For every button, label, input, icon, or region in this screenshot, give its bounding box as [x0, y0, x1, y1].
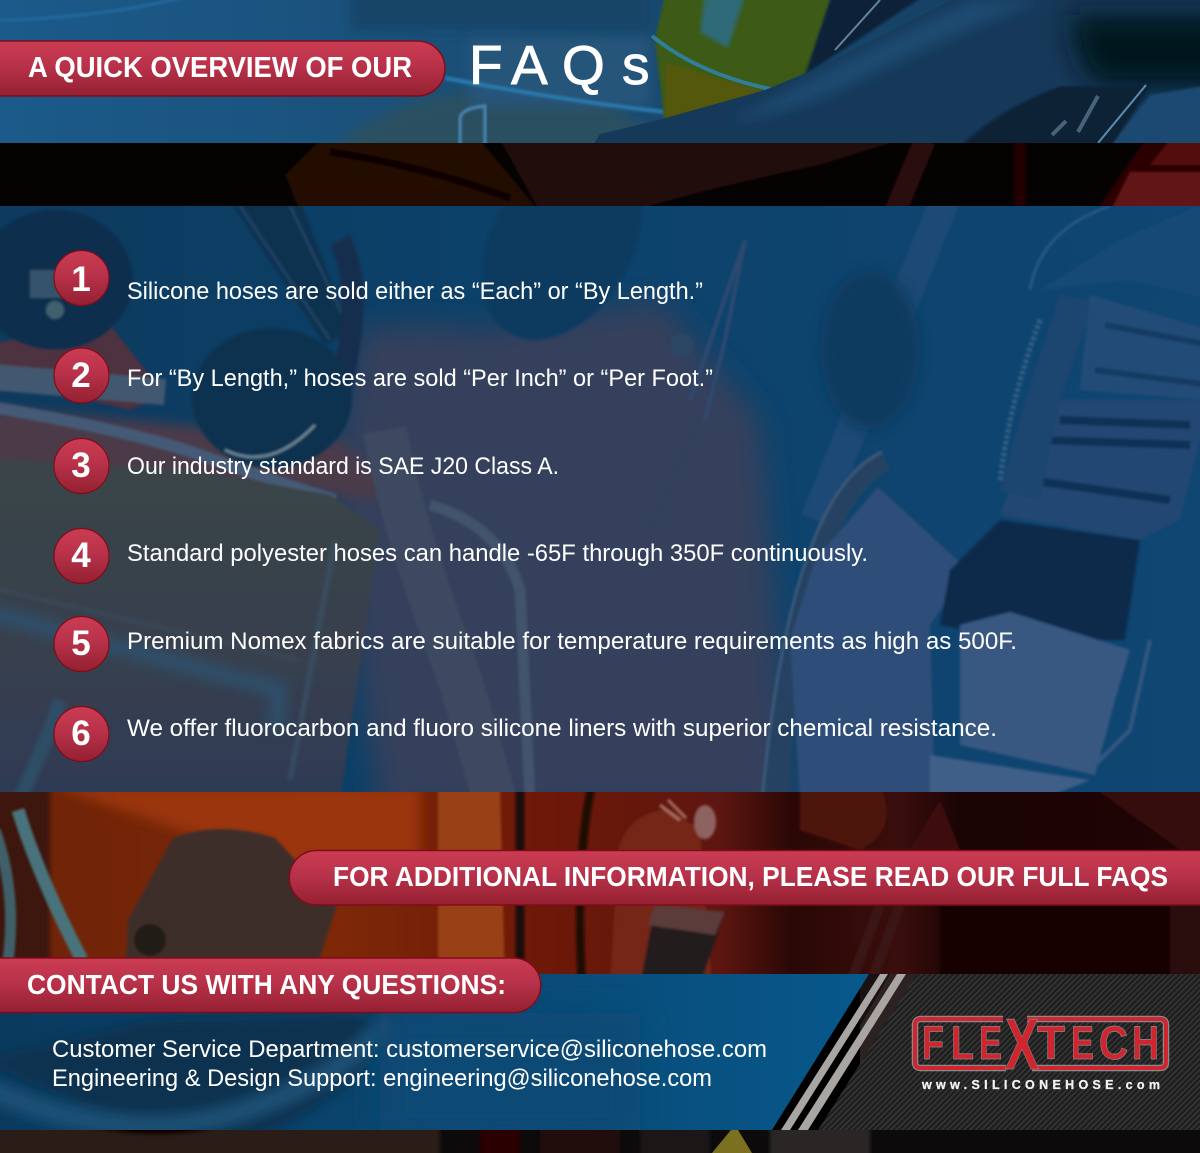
FAQ item 3 [54, 438, 559, 494]
FAQ item 4: 4 [71, 536, 91, 575]
callout pill: read full FAQs [289, 850, 1200, 905]
background band: bottom dark strip [0, 1130, 1200, 1153]
contact details text: Engineering & Design Support: engineering@siliconehose.com [52, 1065, 712, 1092]
FAQ item 1 [54, 250, 703, 306]
FAQ item 3: Our industry standard is SAE J20 Class A. [127, 453, 559, 480]
title: FAQs: s [622, 34, 650, 96]
contact details text [52, 1036, 767, 1092]
background band: main blue panel photo [0, 206, 1200, 792]
callout pill: read full FAQs: FOR ADDITIONAL INFORMATION, PLEASE READ OUR FULL FAQS [333, 861, 1168, 892]
header pill: a quick overview [0, 41, 445, 96]
logo panel: carbon-fibre background with stripes [781, 974, 1200, 1130]
contact heading pill [0, 958, 541, 1012]
FAQ item 4: Standard polyester hoses can handle -65F through 350F continuously. [127, 540, 868, 567]
FAQ item 4 [54, 528, 868, 584]
FAQ item 1: Silicone hoses are sold either as “Each” or “By Length.” [127, 278, 703, 305]
logo: FlexTech: www.SILICONEHOSE.com [921, 1078, 1160, 1092]
FAQ item 3: 3 [71, 446, 91, 485]
FAQ item 2: For “By Length,” hoses are sold “Per Inch” or “Per Foot.” [127, 365, 713, 392]
background band: red lower engine photo [0, 785, 1200, 985]
header pill: a quick overview: A QUICK OVERVIEW OF OUR [28, 52, 412, 84]
logo: FlexTech [915, 1005, 1166, 1092]
logo: FlexTech: H [1132, 1016, 1159, 1069]
logo: FlexTech: E [979, 1016, 1002, 1069]
FAQ item 5: Premium Nomex fabrics are suitable for temperature requirements as high as 500F. [127, 628, 1017, 655]
logo: FlexTech: C [1099, 1016, 1128, 1069]
title: FAQs: Q [562, 34, 605, 96]
contact heading pill: CONTACT US WITH ANY QUESTIONS: [27, 969, 506, 1000]
logo: FlexTech: F [922, 1016, 944, 1069]
logo: FlexTech: E [1071, 1016, 1094, 1069]
contact details text: Customer Service Department: customerservice@siliconehose.com [52, 1036, 767, 1063]
title: FAQs: F [469, 34, 503, 96]
FAQ item 6: We offer fluorocarbon and fluoro silicone liners with superior chemical resistance. [127, 715, 997, 742]
FAQ item 6 [54, 706, 997, 762]
FAQ item 5: 5 [71, 624, 91, 663]
FAQ item 2 [54, 348, 713, 403]
logo: FlexTech: L [951, 1016, 974, 1069]
background band: dark red strip [284, 143, 1200, 206]
logo: FlexTech: T [1037, 1016, 1065, 1069]
logo: FlexTech: X [1005, 1005, 1039, 1085]
background band: footer blue [0, 974, 870, 1143]
title: FAQs: A [511, 34, 548, 96]
FAQ item 2: 2 [71, 356, 91, 395]
FAQ item 5 [54, 616, 1017, 672]
FAQ item 1: 1 [71, 260, 91, 299]
background band: top blue engine photo [0, 0, 1200, 150]
title: FAQs [469, 34, 650, 96]
FAQ item 6: 6 [71, 714, 91, 753]
